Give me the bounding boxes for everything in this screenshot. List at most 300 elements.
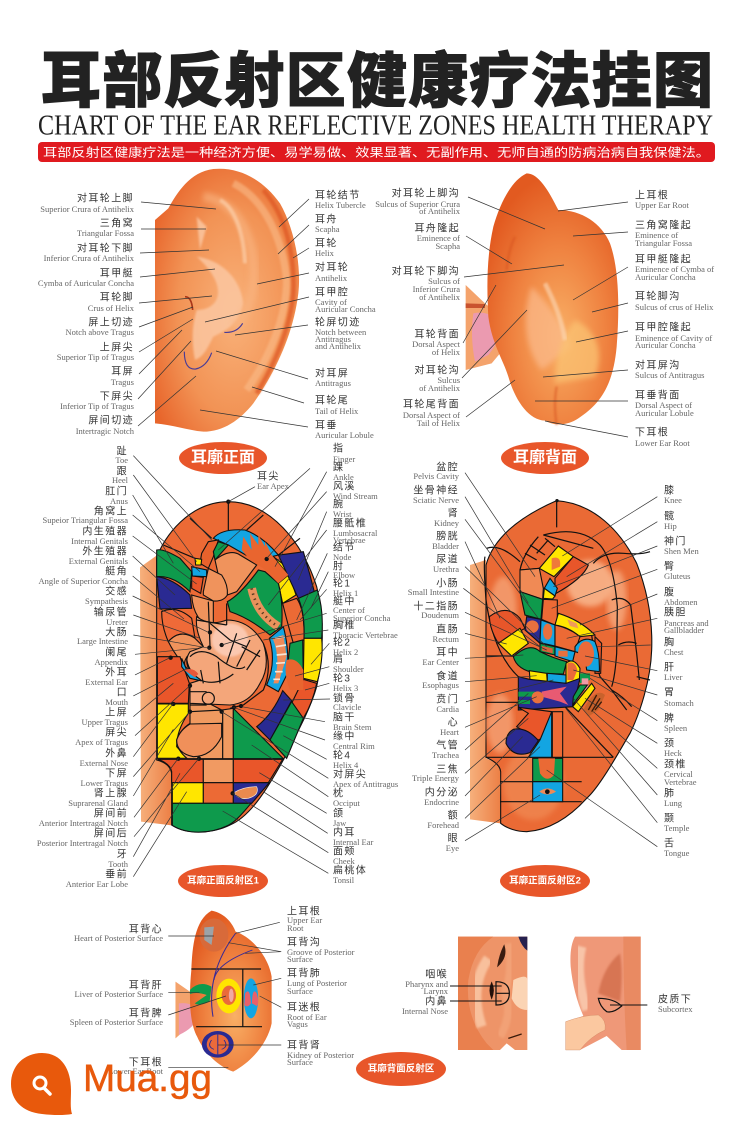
label: 内鼻 <box>402 994 448 1016</box>
label: 胰胆 <box>664 606 709 635</box>
label: 耳背脾: Spleen of Posterior Surface <box>70 1017 163 1027</box>
labels: detail photos <box>402 968 693 1016</box>
label: 耳轮尾背面: 耳轮尾背面 <box>403 398 460 410</box>
leader lines: ear back <box>462 197 628 437</box>
label: 对耳轮上脚沟: 对耳轮上脚沟 <box>392 186 460 200</box>
label: 盆腔 <box>413 460 460 481</box>
label: 耳垂背面: 耳垂背面 <box>635 388 681 402</box>
label: 三角窝隆起: Triangular Fossa <box>635 238 692 248</box>
label: 轮1 <box>333 576 358 598</box>
label: 髋: 髋 <box>664 510 675 522</box>
label: 颌: 颌 <box>333 806 344 820</box>
label: 耳甲腔 <box>315 286 376 314</box>
label: 耳舟隆起: Scapha <box>435 241 460 251</box>
labels: posterior ear, left <box>70 922 164 1076</box>
label: 肛门 <box>105 484 128 506</box>
label: 肛门: Anus <box>110 496 128 506</box>
label: 肺: 肺 <box>664 788 675 800</box>
label: 对耳轮上脚 <box>40 192 135 214</box>
label: 对耳屏: Antitragus <box>315 378 351 388</box>
label: 牙 <box>108 848 129 869</box>
label: 轮4 <box>333 748 359 770</box>
label: 肩: 肩 <box>333 652 344 666</box>
label: 髋: Hip <box>664 521 677 531</box>
label: 盆腔: 盆腔 <box>436 460 459 474</box>
label: 十二指肠: Doudenum <box>421 610 459 620</box>
label: 咽喉: Pharynx and <box>405 979 449 989</box>
label: 风溪: Wind Stream <box>333 491 378 501</box>
label: 颈: Heck <box>664 748 683 758</box>
label: 垂前: Anterior Ear Lobe <box>66 879 128 889</box>
label: 轮屏切迹: Antitragus <box>315 334 351 344</box>
label: 扁桃体: Tonsil <box>333 875 355 885</box>
label: 耳轮背面: 耳轮背面 <box>414 328 460 340</box>
label: 耳甲艇: Cymba of Auricular Concha <box>38 278 134 288</box>
label: 耳背肝 <box>74 978 163 999</box>
label: 咽喉 <box>405 968 449 996</box>
label: 艇中 <box>333 594 391 623</box>
label: 腰骶椎 <box>333 516 378 545</box>
label: 贲门: Cardia <box>436 704 459 714</box>
label: 踝: 踝 <box>333 462 344 474</box>
label: 胃 <box>664 686 694 708</box>
label: 轮2: Helix 2 <box>333 647 358 657</box>
label: 贲门: 贲门 <box>436 692 459 706</box>
panel: ear back photo <box>466 173 618 425</box>
label: 耳迷根 <box>287 1000 327 1029</box>
label: 垂前: 垂前 <box>105 868 128 880</box>
label: 风溪 <box>333 480 378 501</box>
label: 下屏尖 <box>60 390 134 411</box>
badge: 耳廓背面反射区: 耳廓背面反射区 <box>368 1062 435 1074</box>
panel: reflex zone chart 2 <box>470 499 652 832</box>
label: 大肠 <box>77 626 128 646</box>
label: 耳垂: Auricular Lobule <box>315 430 374 440</box>
label: 内生殖器: Internal Genitals <box>71 536 128 546</box>
label: 膝: Knee <box>664 495 682 505</box>
labels: ear back, left <box>375 186 461 428</box>
label: 气管: 气管 <box>436 738 459 752</box>
label: 胃: Stomach <box>664 698 694 708</box>
label: 外耳: External Ear <box>85 677 128 687</box>
label: 上耳根: Upper Ear Root <box>635 200 689 210</box>
label: 耳轮脚沟: 耳轮脚沟 <box>635 290 681 302</box>
label: 腰骶椎: Vertebrae <box>333 535 366 545</box>
label: 耳甲腔: Cavity of <box>315 297 347 307</box>
label: 结节: Node <box>333 552 352 562</box>
label: 颈椎: Vertebrae <box>664 777 697 787</box>
label: 耳迷根: Vagus <box>287 1019 308 1029</box>
label: 屏尖: 屏尖 <box>105 726 128 738</box>
label: 小肠: 小肠 <box>436 578 459 590</box>
label: 耳背脾: 耳背脾 <box>129 1006 163 1020</box>
label: 垂前 <box>66 868 128 889</box>
label: 趾: 趾 <box>117 444 128 458</box>
label: 十二指肠 <box>413 600 459 620</box>
label: 上耳根: 上耳根 <box>287 904 321 918</box>
label: 对耳屏沟: Sulcus of Antitragus <box>635 370 704 380</box>
label: 膀胱: Bladder <box>432 541 459 551</box>
label: 尿道: 尿道 <box>436 552 459 566</box>
label: 腰骶椎: Lumbosacral <box>333 528 378 538</box>
label: 膀胱 <box>432 530 459 551</box>
label: 耳轮脚沟 <box>635 290 714 312</box>
label: 肩: Shoulder <box>333 664 364 674</box>
label: 心: 心 <box>448 716 459 728</box>
badge: 耳廓背面反射区 <box>356 1052 446 1086</box>
label: 角窝上 <box>43 504 128 525</box>
label: 大肠: 大肠 <box>105 626 128 638</box>
label: 贲门 <box>436 692 459 714</box>
label: 三角窝 <box>77 216 134 238</box>
label: 耳迷根: Root of Ear <box>287 1012 327 1022</box>
label: 内耳 <box>333 826 374 847</box>
label: 下耳根: Lower Ear Root <box>635 438 690 448</box>
label: 耳轮尾 <box>315 394 359 416</box>
label: 三焦 <box>412 762 460 783</box>
label: 输尿管: Ureter <box>106 617 128 627</box>
label: 外耳: 外耳 <box>105 666 128 678</box>
label: 轮屏切迹: and Antihelix <box>315 341 362 351</box>
label: 颈: 颈 <box>664 738 675 750</box>
label: 腹: 腹 <box>664 586 675 598</box>
badge: 耳廓正面反射区1: 耳廓正面反射区1 <box>187 874 260 886</box>
label: 耳背肝: 耳背肝 <box>129 978 163 992</box>
label: 缘中: Central Rim <box>333 741 375 751</box>
label: 坐骨神经: Sciatic Nerve <box>413 495 459 505</box>
label: 屏间切迹 <box>76 414 135 436</box>
label: 三焦: 三焦 <box>436 762 459 776</box>
label: 外鼻: External Nose <box>80 758 128 768</box>
label: 轮1: 轮1 <box>333 576 351 590</box>
label: 耳垂: 耳垂 <box>315 420 338 432</box>
label: 坐骨神经: 坐骨神经 <box>413 484 459 496</box>
label: 眼 <box>446 832 459 853</box>
label: 外鼻: 外鼻 <box>105 746 128 760</box>
label: 上耳根 <box>287 904 322 933</box>
label: 耳尖: Ear Apex <box>257 481 290 491</box>
label: 对耳轮下脚沟: of Antihelix <box>419 292 461 302</box>
label: 耳轮结节 <box>315 188 366 210</box>
label: 胸椎: 胸椎 <box>333 618 356 632</box>
label: 腹 <box>664 586 698 607</box>
label: 轮屏切迹 <box>315 316 367 351</box>
label: 跟: Heel <box>112 475 129 485</box>
label: 轮4: Helix 4 <box>333 760 359 770</box>
label: 三角窝隆起: Eminence of <box>635 230 678 240</box>
label: 尿道 <box>433 552 459 574</box>
label: 内生殖器: 内生殖器 <box>82 524 128 538</box>
label: 对耳轮下脚沟 <box>392 264 461 302</box>
leader lines: ear front <box>138 199 309 427</box>
label: 直肠: Rectum <box>433 634 459 644</box>
label: 肾: Kidney <box>434 518 460 528</box>
label: 耳甲腔隆起: Auricular Concha <box>635 340 696 350</box>
label: 耳背沟: 耳背沟 <box>287 936 321 948</box>
label: 耳背肾: 耳背肾 <box>287 1038 321 1052</box>
label: 耳舟: 耳舟 <box>315 212 338 226</box>
label: 内耳: 内耳 <box>333 826 356 838</box>
badge: 耳廓正面反射区2: 耳廓正面反射区2 <box>509 874 581 886</box>
label: 轮2: 轮2 <box>333 636 351 648</box>
label: 耳舟 <box>315 212 340 234</box>
label: 枕: 枕 <box>333 786 344 800</box>
label: 耳轮尾背面: Dorsal Aspect of <box>403 410 460 420</box>
label: 肝 <box>664 662 683 682</box>
label: 耳背肝: Liver of Posterior Surface <box>74 989 163 999</box>
label: 内生殖器 <box>71 524 128 546</box>
label: 三角窝隆起 <box>635 218 692 248</box>
label: 对耳屏: 对耳屏 <box>315 366 349 380</box>
labels: ear back, right <box>635 188 714 448</box>
label: 耳甲艇隆起 <box>635 252 714 282</box>
label: 颈椎: Cervical <box>664 769 693 779</box>
label: 耳中: Ear Center <box>422 657 459 667</box>
label: 耳垂 <box>315 420 374 440</box>
badge: 耳廓正面: 耳廓正面 <box>191 448 255 466</box>
label: 耳轮背面: Dorsal Aspect <box>412 339 461 349</box>
label: 对耳轮上脚沟: Sulcus of Superior Crura <box>375 199 460 209</box>
label: 耳甲腔隆起: Eminence of Cavity of <box>635 333 712 343</box>
label: 胰胆: 胰胆 <box>664 606 687 618</box>
label: 上屏尖: 上屏尖 <box>100 340 134 354</box>
label: 腕 <box>333 498 352 519</box>
label: 神门 <box>664 534 699 556</box>
label: 对屏尖 <box>333 768 398 789</box>
label: 轮3 <box>333 672 358 693</box>
label: 耳尖: 耳尖 <box>257 470 280 482</box>
label: 对耳轮沟: of Antihelix <box>419 383 461 393</box>
labels: chart 1, left <box>37 444 129 889</box>
label: 脑干 <box>333 710 372 732</box>
label: 臀: 臀 <box>664 560 675 572</box>
label: 对耳轮沟: Sulcus <box>437 375 460 385</box>
label: 屏尖: Apex of Tragus <box>75 737 128 747</box>
label: 舌 <box>664 838 690 858</box>
label: 胸 <box>664 636 684 657</box>
label: 扁桃体: 扁桃体 <box>333 864 367 876</box>
label: 坐骨神经 <box>413 484 459 505</box>
label: 耳背肺: Lung of Posterior <box>287 978 347 988</box>
label: 面颊 <box>333 844 356 866</box>
label: 耳轮脚: 耳轮脚 <box>100 290 134 304</box>
labels: chart 2, right <box>664 484 709 858</box>
label: 对耳轮上脚: Superior Crura of Antihelix <box>40 204 135 214</box>
labels: chart 2, left <box>408 460 460 853</box>
watermark: Mua.gg logo: Mua.gg <box>83 1058 212 1100</box>
label: 对耳轮下脚 <box>44 242 135 263</box>
labels: chart 1, right <box>333 442 398 885</box>
label: 下屏: 下屏 <box>105 768 128 780</box>
label: 耳背肾: Surface <box>287 1057 313 1067</box>
label: 耳背肺: 耳背肺 <box>287 966 321 980</box>
label: 皮质下: 皮质下 <box>658 992 692 1006</box>
label: 内耳: Internal Ear <box>333 837 374 847</box>
label: 内鼻: Internal Nose <box>402 1006 448 1016</box>
label: 膝 <box>664 484 682 505</box>
label: 对耳轮上脚沟 <box>375 186 461 216</box>
label: 耳背沟: Groove of Posterior <box>287 947 355 957</box>
label: 面颊: 面颊 <box>333 844 356 858</box>
label: 指 <box>333 442 355 464</box>
label: 下屏: Lower Tragus <box>81 778 128 788</box>
label: 耳轮脚: Crus of Helix <box>88 303 135 313</box>
label: 皮质下 <box>658 992 693 1014</box>
label: 耳甲腔隆起: 耳甲腔隆起 <box>635 320 692 334</box>
label: 耳甲腔隆起 <box>635 320 712 350</box>
label: 脑干: 脑干 <box>333 710 356 724</box>
label: 对耳轮下脚沟: Sulcus of <box>428 276 460 286</box>
red intro banner: 耳部反射区健康疗法是一种经济方便、易学易做、效果显著、无副作用、无师自通的防病治病自我保健法。 <box>43 144 710 160</box>
label: 缘中: 缘中 <box>333 730 356 742</box>
label: 口: 口 <box>117 688 128 698</box>
label: 艇中: Center of <box>333 605 365 615</box>
label: 上屏: 上屏 <box>105 706 128 718</box>
label: 趾: Toe <box>115 455 128 465</box>
label: 耳轮脚沟: Sulcus of crus of Helix <box>635 302 714 312</box>
label: 胰胆: Pancreas and <box>664 618 709 628</box>
label: 耳背肺: Surface <box>287 986 313 996</box>
label: 屏上切迹 <box>66 316 134 337</box>
label: 三角窝: Triangular Fossa <box>77 228 134 238</box>
label: 胰胆: Gallbladder <box>664 625 704 635</box>
label: 耳中: 耳中 <box>436 646 459 658</box>
label: 外生殖器: External Genitals <box>69 556 128 566</box>
label: 皮质下: Subcortex <box>658 1004 693 1014</box>
label: 脾: 脾 <box>664 712 675 724</box>
label: 耳背心: 耳背心 <box>129 922 163 936</box>
label: 耳垂背面 <box>635 388 694 418</box>
label: 艇中: 艇中 <box>333 594 356 608</box>
label: 锁骨: 锁骨 <box>333 692 356 704</box>
label: 耳轮背面: of Helix <box>432 347 461 357</box>
label: 下耳根: 下耳根 <box>129 1056 163 1068</box>
label: 耳轮脚 <box>88 290 135 313</box>
label: 肺: Lung <box>664 798 683 808</box>
label: 大肠: Large Intestine <box>77 636 128 646</box>
label: 锁骨: Clavicle <box>333 702 362 712</box>
label: 外鼻 <box>80 746 128 768</box>
label: 耳舟隆起 <box>414 222 460 251</box>
label: 指: 指 <box>333 442 344 454</box>
label: 耳背脾 <box>70 1006 163 1027</box>
label: 肛门: 肛门 <box>105 484 128 498</box>
label: 屏间切迹: Intertragic Notch <box>76 426 135 436</box>
label: 下耳根: Lower Ear Root <box>108 1066 164 1076</box>
label: 屏尖 <box>75 726 128 747</box>
label: 交感: Sympathesis <box>85 596 128 606</box>
label: 上屏: Upper Tragus <box>81 717 128 727</box>
label: 屏间前: 屏间前 <box>94 806 128 820</box>
label: 气管: Trachea <box>432 750 459 760</box>
label: 眼: Eye <box>446 843 459 853</box>
label: 耳轮背面 <box>412 328 461 357</box>
label: 跟: 跟 <box>117 466 128 478</box>
label: 神门: Shen Men <box>664 546 699 556</box>
label: 艇中: Superior Concha <box>333 613 391 623</box>
label: 枕: Occiput <box>333 798 361 808</box>
label: 对耳轮下脚: Inferior Crura of Antihelix <box>44 253 135 263</box>
label: 心: Heart <box>440 727 460 737</box>
label: 尿道: Urethra <box>433 564 459 574</box>
label: 髋 <box>664 510 677 531</box>
label: 屏上切迹: 屏上切迹 <box>88 316 134 328</box>
label: 外耳 <box>85 666 128 687</box>
label: 艇角 <box>39 564 128 586</box>
label: 肘: Elbow <box>333 570 356 580</box>
badge: 耳廓正面反射区2 <box>500 865 590 897</box>
label: 额: Forehead <box>427 820 460 830</box>
label: 对耳轮: 对耳轮 <box>315 260 349 274</box>
label: 胸: 胸 <box>664 636 675 648</box>
label: 耳背沟 <box>287 936 355 964</box>
label: 腕: 腕 <box>333 498 344 510</box>
label: 肾: 肾 <box>448 508 459 520</box>
label: 耳舟隆起: 耳舟隆起 <box>414 222 460 234</box>
label: 腹: Abdomen <box>664 597 698 607</box>
label: 艇角: 艇角 <box>105 564 128 578</box>
panel: ear front photo <box>155 169 299 432</box>
label: 耳甲腔: 耳甲腔 <box>315 286 349 298</box>
label: 下耳根 <box>635 426 690 448</box>
label: 屏间后 <box>37 826 129 848</box>
label: 耳甲艇隆起: 耳甲艇隆起 <box>635 252 692 266</box>
label: 额: 额 <box>448 808 459 822</box>
label: 颌 <box>333 806 347 828</box>
label: 上耳根: 上耳根 <box>635 188 669 202</box>
badge: 耳廓正面 <box>179 442 267 474</box>
label: 直肠 <box>433 622 459 644</box>
label: 肝: Liver <box>664 672 683 682</box>
label: 上耳根: Upper Ear <box>287 915 322 925</box>
label: 输尿管: 输尿管 <box>94 606 128 618</box>
panel: detail photo, pharynx and internal nose <box>450 937 527 1050</box>
label: 耳背肺 <box>287 966 347 996</box>
label: 臀: Gluteus <box>664 571 690 581</box>
label: 上耳根 <box>635 188 689 210</box>
label: 肾 <box>434 508 460 528</box>
label: 枕 <box>333 786 361 808</box>
labels: posterior ear, right <box>287 904 355 1067</box>
label: 耳轮结节: 耳轮结节 <box>315 188 361 202</box>
label: 气管 <box>432 738 459 760</box>
label: 耳舟隆起: Eminence of <box>417 233 460 243</box>
label: 三角窝隆起: 三角窝隆起 <box>635 218 692 232</box>
label: 三焦: Triple Energy <box>412 773 460 783</box>
label: 胸椎: Thoracic Vertebrae <box>333 630 398 640</box>
label: 扁桃体 <box>333 864 367 885</box>
label: 颞: Temple <box>664 823 690 833</box>
label: 屏间前 <box>39 806 129 828</box>
label: 轮1: Helix 1 <box>333 588 358 598</box>
label: 踝 <box>333 462 354 482</box>
label: 输尿管 <box>94 606 128 627</box>
label: 小肠: Small Intestine <box>408 587 459 597</box>
label: 耳甲艇 <box>38 266 134 288</box>
label: 颈 <box>664 738 683 758</box>
label: 咽喉: 咽喉 <box>425 968 448 980</box>
label: 心 <box>440 716 460 737</box>
label: 肘: 肘 <box>333 560 344 572</box>
label: 耳轮结节: Helix Tubercle <box>315 200 366 210</box>
label: 口: Mouth <box>105 697 129 707</box>
label: 肘 <box>333 560 356 580</box>
label: 臀 <box>664 560 690 581</box>
label: 舌: 舌 <box>664 838 675 850</box>
label: 胃: 胃 <box>664 686 675 698</box>
label: 上屏尖: Superior Tip of Tragus <box>57 352 134 362</box>
label: 内分泌: 内分泌 <box>425 786 459 798</box>
